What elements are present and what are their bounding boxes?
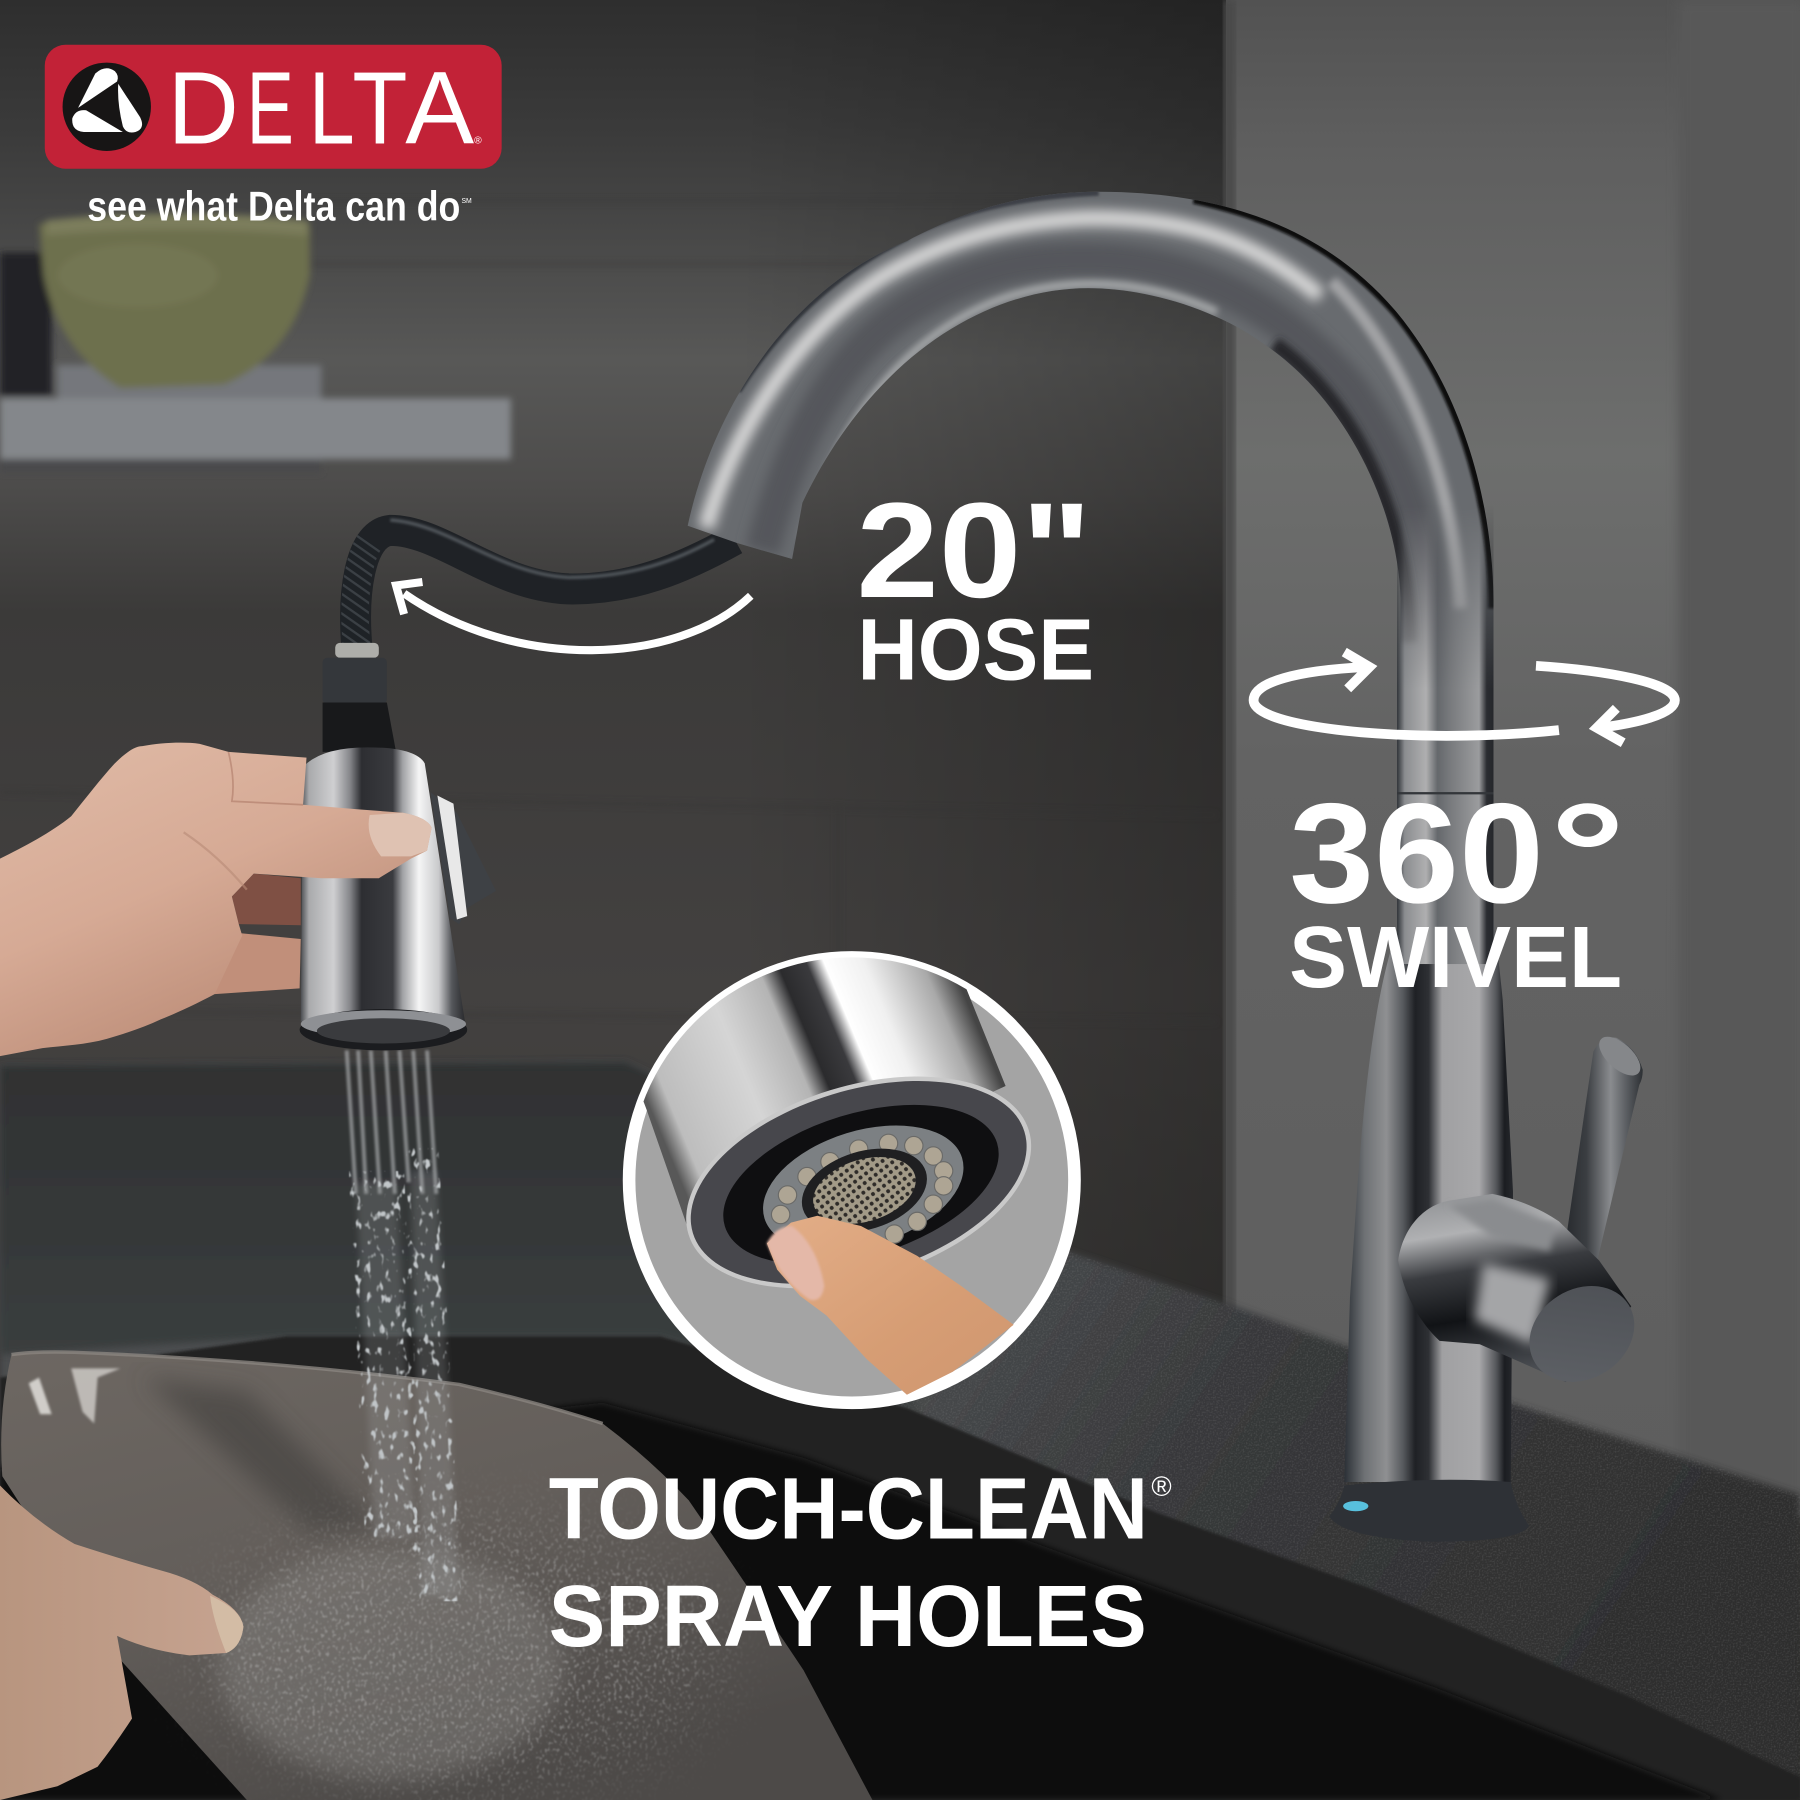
countertop	[0, 1062, 1800, 1800]
faucet: stem and base	[1329, 505, 1529, 1542]
callout: 360 degree swivel	[1289, 774, 1626, 1006]
shelf with green bowls	[0, 214, 511, 473]
fingertip	[767, 1216, 1014, 1395]
DELTA wordmark: L	[309, 49, 355, 165]
caption: touch-clean spray holes: SPRAY HOLES	[549, 1568, 1147, 1665]
DELTA wordmark: A	[405, 49, 474, 165]
DELTA wordmark: T	[352, 49, 408, 165]
callout: 20 inch hose: 20"	[856, 474, 1092, 626]
callout: 360 degree swivel: °	[1550, 774, 1626, 933]
arrow: hose pull-out	[396, 582, 751, 650]
pull-down spray head	[300, 643, 496, 1050]
callout: 360 degree swivel: SWIVEL	[1289, 909, 1622, 1006]
callout: 360 degree swivel: 360	[1289, 774, 1544, 933]
water spray	[347, 1050, 461, 1601]
caption: touch-clean spray holes: TOUCH-CLEAN	[549, 1460, 1148, 1557]
DELTA wordmark	[168, 49, 474, 165]
inset circle: touch-clean spray holes	[622, 951, 1081, 1410]
Delta logo	[45, 45, 502, 169]
plate in sink	[1, 1352, 872, 1800]
tagline: SM	[461, 198, 472, 205]
callout: 20 inch hose	[856, 474, 1094, 699]
callout: 20 inch hose: HOSE	[858, 602, 1094, 699]
logo triangle mark	[72, 68, 142, 133]
arrows: 360 degree swivel	[1254, 652, 1675, 743]
tagline: see what Delta can do	[87, 183, 460, 229]
caption: touch-clean spray holes: ®	[1151, 1471, 1172, 1502]
DELTA wordmark: E	[247, 49, 294, 165]
faucet: arched spout	[688, 192, 1494, 643]
faucet: handle lever	[1398, 1030, 1652, 1401]
pull-down hose	[355, 520, 735, 649]
DELTA wordmark: D	[168, 49, 239, 165]
hand gripping spray head	[0, 743, 432, 1056]
spray nozzles ring	[771, 1134, 953, 1243]
Delta logo: ®	[474, 135, 482, 146]
caption: touch-clean spray holes	[549, 1460, 1172, 1665]
lower hand holding plate	[0, 1485, 243, 1800]
